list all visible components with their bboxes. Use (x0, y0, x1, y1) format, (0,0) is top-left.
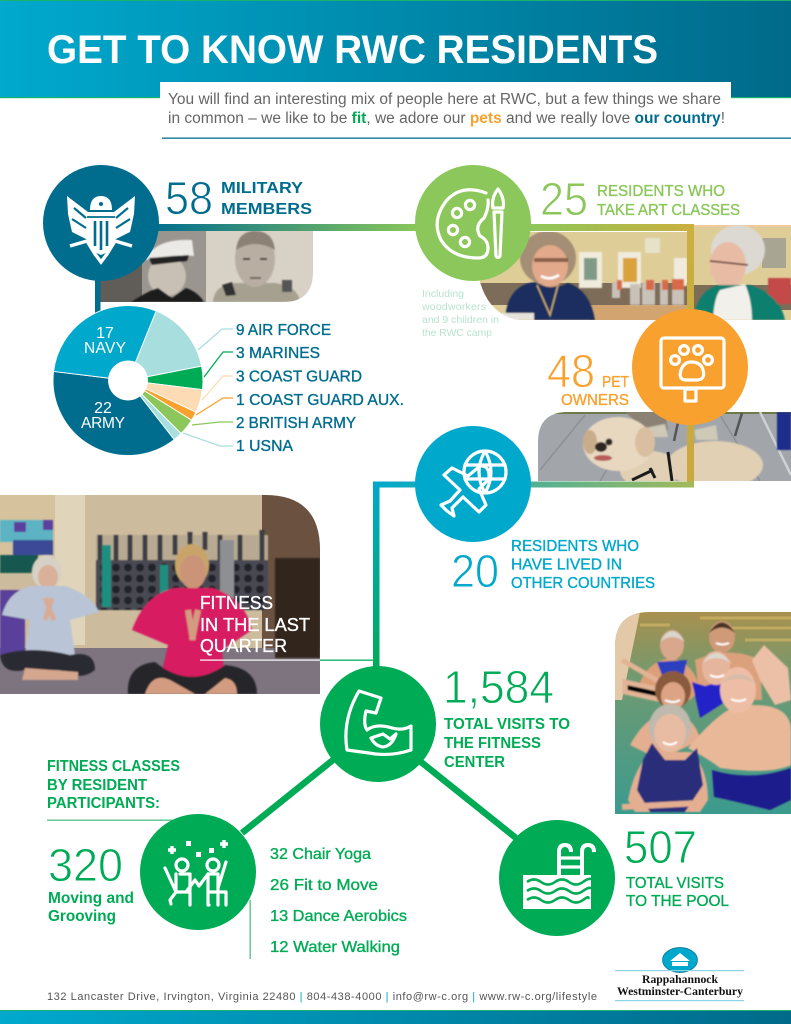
military stat: MILITARY (221, 180, 303, 197)
logo: Rappahannock Westminster-Canterbury (615, 948, 744, 1001)
logo: Rappahannock Westminster-Canterbury: Rappahannock (642, 974, 719, 986)
pet stat (547, 345, 629, 409)
fitness class list: 26 Fit to Move (270, 877, 378, 894)
fitness photo caption: IN THE LAST (200, 615, 310, 635)
fitness photo caption (200, 593, 320, 661)
moving and grooving stat: Moving and (48, 890, 134, 907)
icon: swimming pool circle (499, 820, 615, 936)
fitness classes heading (47, 758, 180, 821)
pie legend: 9 AIR FORCE (236, 322, 331, 339)
pie legend: 3 MARINES (236, 345, 320, 362)
pie chart: military branches (53, 306, 203, 455)
fitness classes heading: FITNESS CLASSES (47, 758, 180, 775)
pool stat: 507 (624, 821, 697, 873)
intro text box: in common – we like to be fit, we adore our pets and we really love our country! (168, 110, 725, 127)
countries stat: HAVE LIVED IN (511, 556, 622, 574)
pet stat: PET (602, 374, 629, 391)
icon: flexed arm circle (320, 666, 436, 782)
military stat: 58 (165, 172, 213, 224)
countries stat: OTHER COUNTRIES (511, 575, 655, 592)
pie legend (183, 322, 404, 455)
intro text box (160, 82, 791, 139)
pie chart: military branches: 17 (96, 325, 114, 342)
photo: residents in the pool (615, 612, 791, 814)
photo: dog on deck (538, 412, 791, 481)
pool stat (624, 821, 729, 910)
footer bar (0, 1010, 791, 1024)
pet stat: 48 (547, 345, 595, 397)
icon: dancing figures circle (140, 814, 256, 930)
connector lines (95, 224, 694, 838)
art stat: RESIDENTS WHO (597, 183, 725, 200)
photo: art class, right (694, 225, 791, 320)
art stat (540, 173, 740, 225)
fitness class list: 12 Water Walking (270, 939, 400, 956)
photo: two military portraits (100, 231, 313, 302)
countries stat: RESIDENTS WHO (511, 538, 639, 555)
fitness center stat: THE FITNESS (444, 735, 541, 752)
military stat (165, 172, 312, 224)
photo: fitness class (0, 495, 320, 694)
military stat: MEMBERS (221, 201, 312, 218)
pie chart: military branches: NAVY (84, 340, 126, 357)
fitness photo caption: QUARTER (200, 636, 287, 656)
pie chart: military branches: 22 (94, 400, 112, 417)
pie legend: 2 BRITISH ARMY (236, 415, 356, 432)
pet stat: OWNERS (561, 392, 629, 409)
art stat: 25 (540, 173, 588, 225)
fitness class list: 32 Chair Yoga (270, 846, 371, 863)
moving and grooving stat (48, 839, 134, 925)
fitness photo caption: FITNESS (200, 593, 273, 613)
countries stat: 20 (451, 545, 499, 597)
header banner (0, 0, 791, 98)
title: GET TO KNOW RWC RESIDENTS (47, 28, 658, 72)
icon: pet paw sign circle (632, 309, 748, 425)
pie legend: 3 COAST GUARD (236, 368, 362, 386)
pool stat: TOTAL VISITS (626, 875, 724, 892)
footer contact line: 132 Lancaster Drive, Irvington, Virginia 22480 | 804-438-4000 | info@rw-c.org | www.rw-c.org/lifestyle (47, 991, 597, 1003)
moving and grooving stat: 320 (48, 839, 123, 891)
art stat: TAKE ART CLASSES (597, 202, 740, 219)
icon: military eagle circle (43, 165, 159, 281)
pie legend: 1 USNA (236, 438, 293, 455)
fitness class list: 13 Dance Aerobics (270, 908, 407, 925)
fitness center stat (443, 661, 570, 771)
art note (421, 288, 499, 339)
fitness class list (250, 846, 407, 959)
fitness classes heading: BY RESIDENT (47, 777, 147, 794)
icon: art palette circle (415, 165, 531, 281)
photo: art class, left (480, 231, 687, 320)
fitness center stat: 1,584 (443, 661, 554, 713)
pie legend: 1 COAST GUARD AUX. (236, 392, 404, 409)
logo: Rappahannock Westminster-Canterbury: Westminster-Canterbury (617, 986, 743, 998)
fitness center stat: TOTAL VISITS TO (444, 716, 570, 733)
art note: woodworkers (421, 301, 486, 313)
pie chart: military branches: ARMY (81, 415, 125, 432)
art note: Including (422, 288, 464, 300)
art note: and 9 children in (422, 314, 499, 326)
art note: the RWC camp (422, 327, 492, 339)
moving and grooving stat: Grooving (48, 908, 116, 925)
pool stat: TO THE POOL (626, 893, 729, 910)
countries stat (451, 538, 655, 597)
fitness center stat: CENTER (444, 754, 505, 771)
intro text box: You will find an interesting mix of people here at RWC, but a few things we share (168, 91, 721, 108)
icon: globe and plane circle (415, 426, 531, 542)
fitness classes heading: PARTICIPANTS: (47, 795, 160, 812)
